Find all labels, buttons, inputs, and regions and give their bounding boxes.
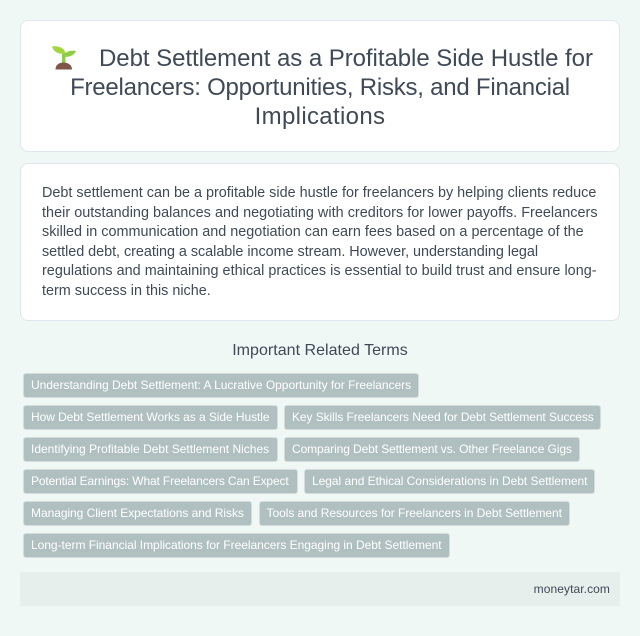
tag 5 <box>284 437 580 462</box>
tag 3: Key Skills Freelancers Need for Debt Settlement Success <box>292 410 594 424</box>
tag 7 <box>304 469 595 494</box>
title line 3: Implications <box>255 103 385 130</box>
tag 3 <box>284 405 601 430</box>
tag 8: Managing Client Expectations and Risks <box>31 506 244 520</box>
tag group: related terms <box>23 373 601 558</box>
tag 7: Legal and Ethical Considerations in Debt Settlement <box>312 474 587 488</box>
tag 9 <box>258 501 570 526</box>
panel: summary paragraph card <box>20 163 620 321</box>
tag 10 <box>23 533 450 558</box>
tag 6: Potential Earnings: What Freelancers Can Expect <box>31 474 289 488</box>
paragraph line 6: term success in this niche. <box>42 282 211 298</box>
tag 2 <box>23 405 278 430</box>
footer source text: moneytar.com <box>534 582 610 596</box>
paragraph line 1: Debt settlement can be a profitable side hustle for freelancers by helping clients reduce <box>42 185 596 201</box>
heading: related terms: Important Related Terms <box>232 342 408 359</box>
footer bar <box>20 572 620 606</box>
tag 4: Identifying Profitable Debt Settlement Niches <box>31 442 269 456</box>
title line 1: Debt Settlement as a Profitable Side Hustle for <box>99 45 593 72</box>
tag 5: Comparing Debt Settlement vs. Other Freelance Gigs <box>292 442 572 456</box>
tag 4 <box>23 437 278 462</box>
tag 8 <box>23 501 252 526</box>
tag 9: Tools and Resources for Freelancers in Debt Settlement <box>266 506 562 520</box>
tag 6 <box>23 469 298 494</box>
title line 2: Freelancers: Opportunities, Risks, and Financial <box>70 74 570 101</box>
tag 1 <box>23 373 419 398</box>
paragraph line 4: settled debt, creating a scalable income stream. However, understanding legal <box>42 244 538 260</box>
tag 1: Understanding Debt Settlement: A Lucrative Opportunity for Freelancers <box>31 378 411 392</box>
paragraph line 2: their outstanding balances and negotiating with creditors for lower payoffs. Freelancers <box>42 204 598 220</box>
icon: sprout <box>52 46 76 70</box>
paragraph line 5: regulations and maintaining ethical practices is essential to build trust and ensure long- <box>42 263 597 279</box>
panel: title card <box>20 20 620 152</box>
tag 2: How Debt Settlement Works as a Side Hustle <box>31 410 269 424</box>
paragraph line 3: skilled in communication and negotiation can earn fees based on a percentage of the <box>42 224 584 240</box>
tag 10: Long-term Financial Implications for Freelancers Engaging in Debt Settlement <box>31 538 442 552</box>
